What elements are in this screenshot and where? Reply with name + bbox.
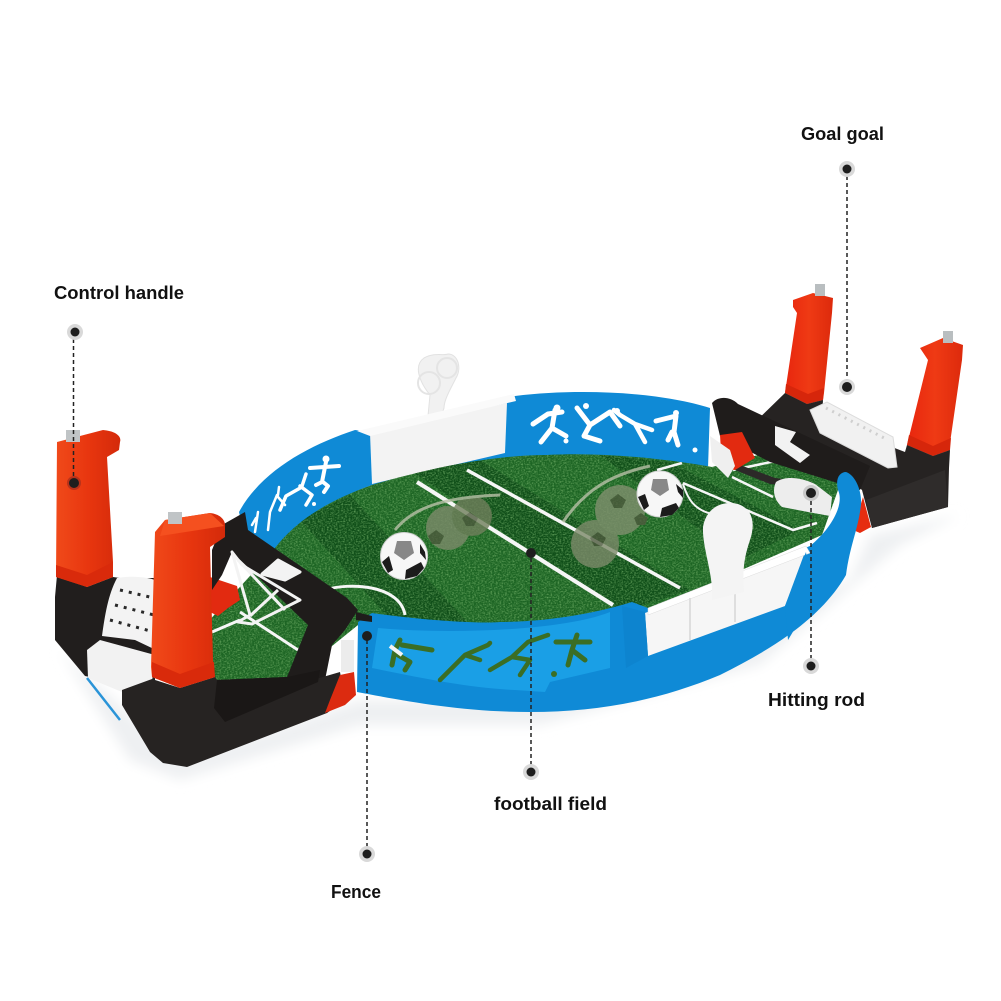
front white panel bbox=[645, 552, 805, 656]
soccer ball left bbox=[380, 532, 428, 580]
infographic bbox=[54, 126, 963, 898]
floor shadows bbox=[60, 515, 960, 780]
callout: hitting rod: Hitting rod bbox=[768, 690, 865, 710]
goal net front bbox=[232, 552, 300, 624]
anchor dot bbox=[67, 324, 83, 340]
pitch lines bbox=[212, 458, 838, 650]
left front unit bbox=[122, 512, 372, 767]
callout: football field bbox=[494, 548, 607, 814]
right unit bbox=[710, 284, 963, 533]
hitting rod striker foot bbox=[774, 478, 832, 516]
left rear unit bbox=[55, 430, 156, 720]
hitting figure behind back wall bbox=[418, 354, 459, 420]
black base front bbox=[122, 672, 345, 767]
red piece under arm bbox=[210, 577, 240, 616]
back fence bbox=[239, 392, 710, 560]
red side clip right bbox=[853, 497, 871, 533]
rear right handle bbox=[785, 284, 833, 404]
green player cutouts bbox=[392, 635, 590, 680]
black arm right bbox=[712, 398, 870, 490]
callout: goal goal: Goal goal bbox=[801, 124, 884, 144]
white step bbox=[87, 640, 155, 692]
mown stripes bbox=[300, 455, 800, 630]
white player silhouettes right bbox=[533, 403, 698, 452]
blue wall posts bbox=[785, 552, 812, 640]
front handle bbox=[151, 512, 225, 688]
blue edge strip bbox=[87, 678, 120, 720]
front fence bbox=[357, 472, 861, 712]
rear handle bbox=[56, 430, 120, 587]
motion ghost balls bbox=[395, 466, 650, 568]
white player silhouettes left bbox=[252, 456, 339, 532]
callout: fence bbox=[331, 631, 381, 902]
white band on cutout bbox=[390, 646, 402, 655]
callout: goal goal bbox=[801, 124, 884, 395]
spoon striker bbox=[703, 503, 753, 600]
callout: football field: football field bbox=[494, 794, 607, 814]
recessed panel bbox=[372, 612, 610, 692]
callout: hitting rod bbox=[768, 485, 865, 710]
callout: control handle: Control handle bbox=[54, 283, 184, 303]
goal right bbox=[810, 402, 897, 468]
goal left bbox=[102, 577, 156, 650]
callout: fence: Fence bbox=[331, 882, 381, 902]
black arm bbox=[212, 512, 358, 695]
callout: control handle bbox=[54, 283, 184, 489]
white sponsor panel bbox=[370, 403, 507, 484]
soccer ball right bbox=[637, 471, 683, 517]
goalkeeper paddle right bbox=[710, 436, 735, 478]
white bracket right bbox=[775, 426, 810, 463]
far right handle bbox=[907, 331, 963, 456]
side post and red clip bbox=[325, 612, 372, 713]
football field bbox=[200, 445, 850, 685]
black base rear bbox=[55, 575, 155, 690]
black base right bbox=[747, 393, 950, 528]
